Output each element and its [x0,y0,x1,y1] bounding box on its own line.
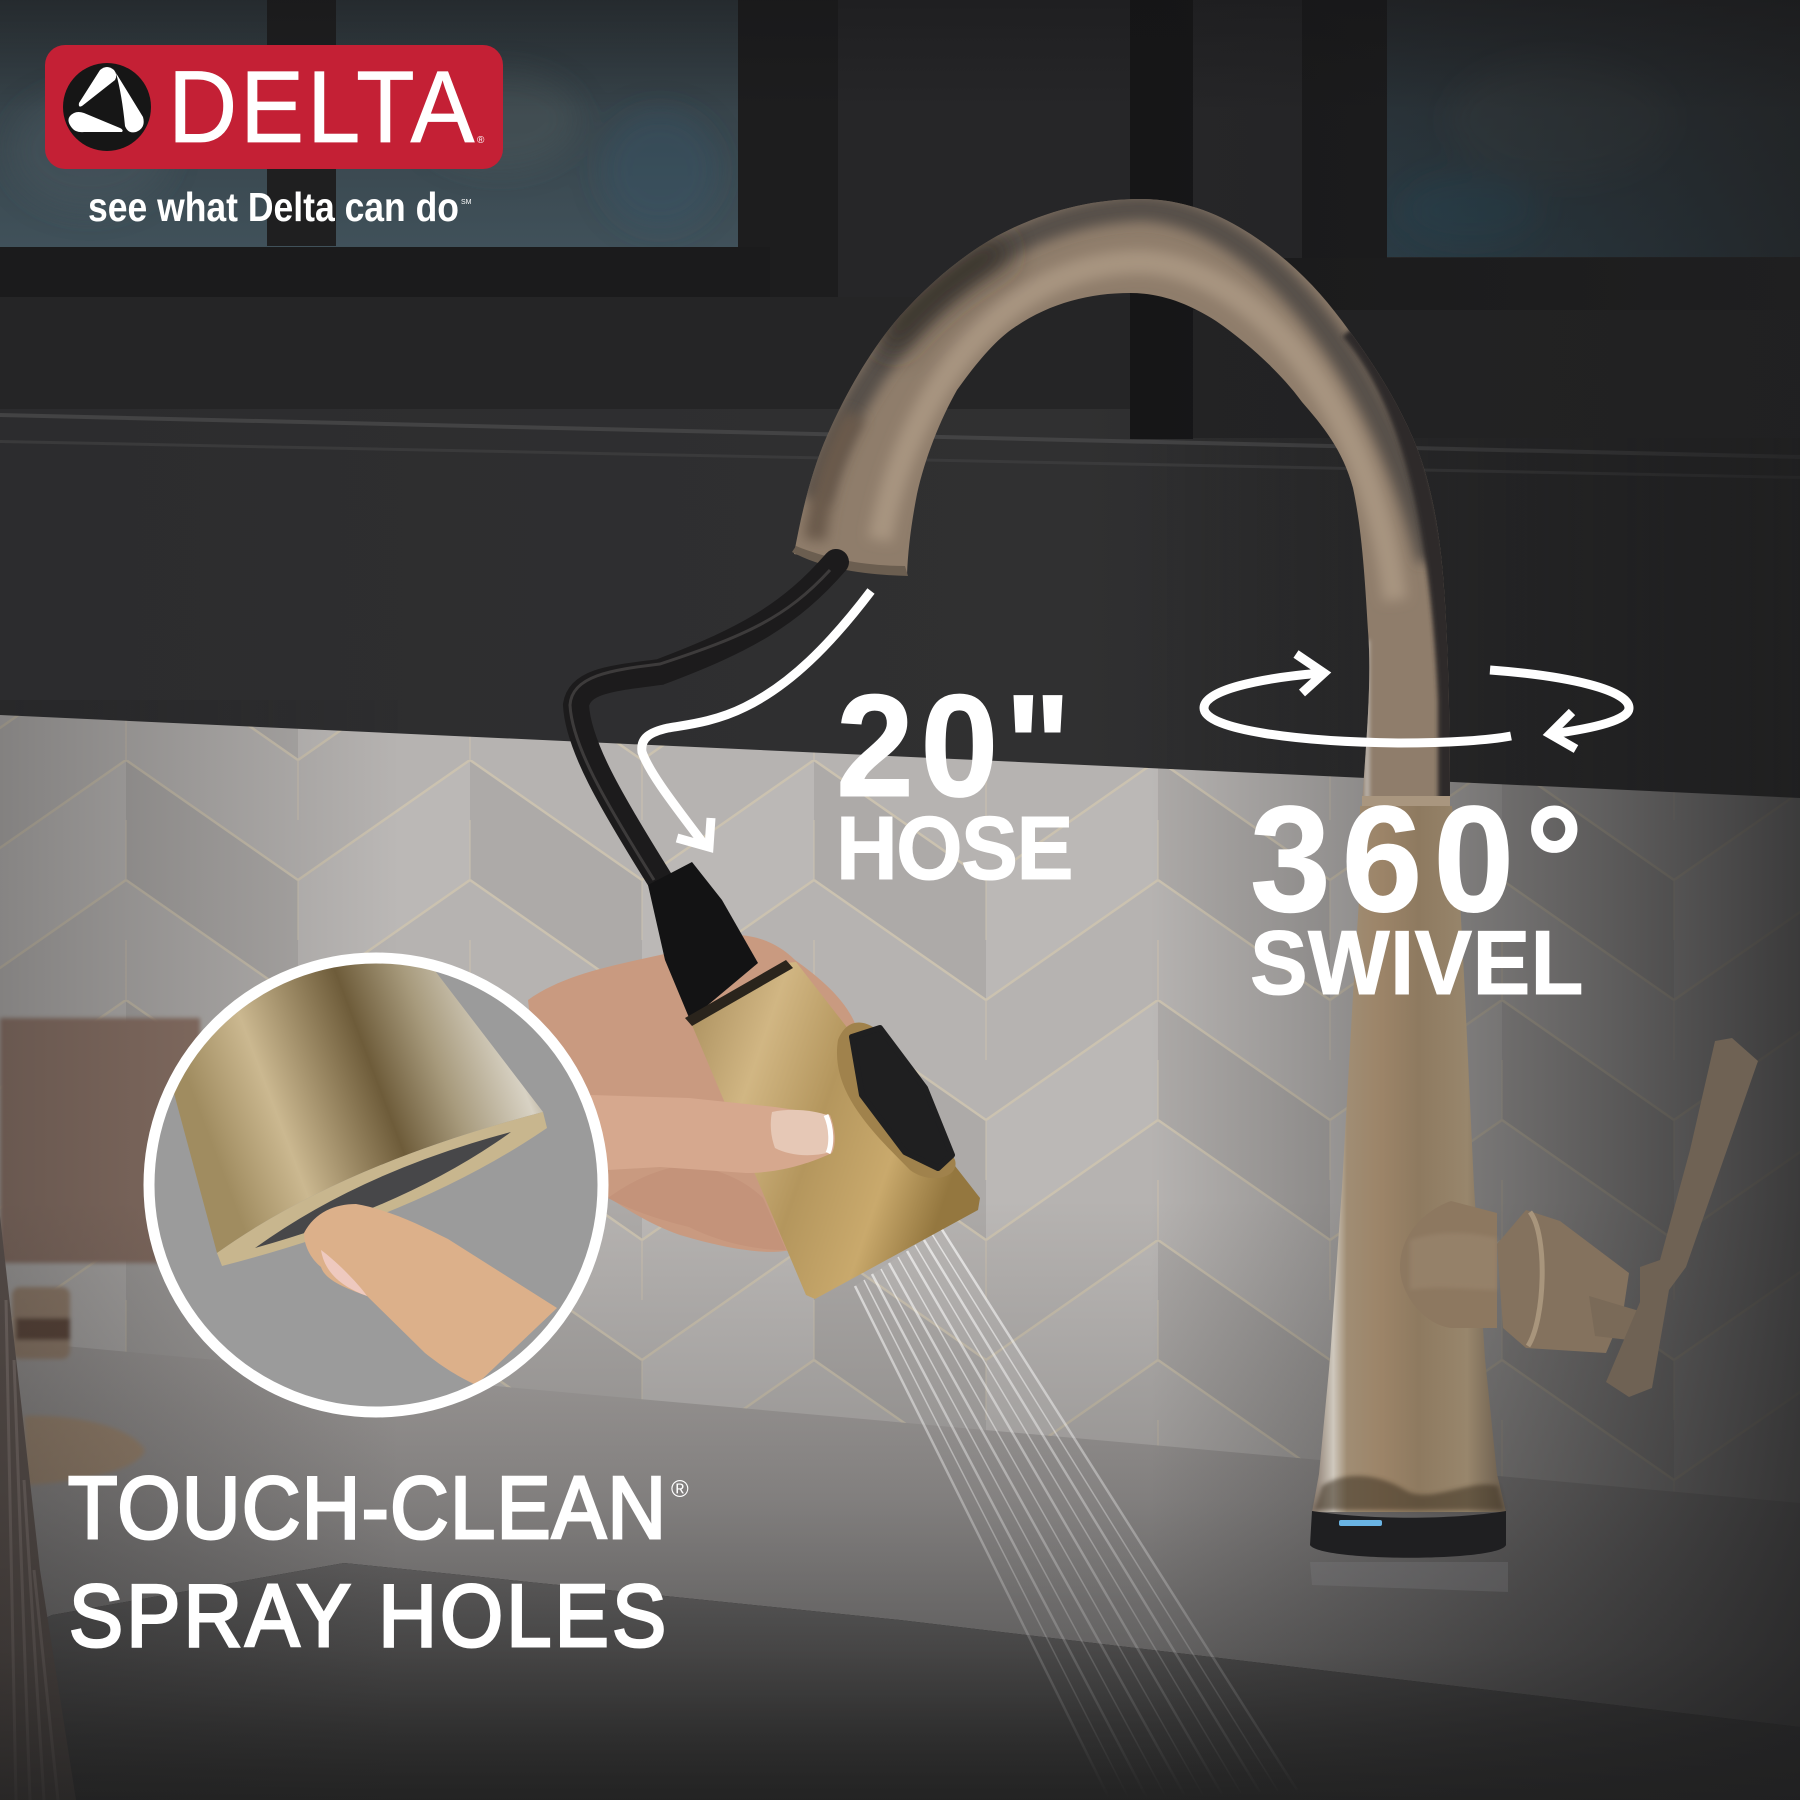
logo emblem [63,63,151,151]
background: blurred arm [0,1018,200,1263]
background: cabinet frame rails [0,0,1800,479]
logo: Delta red badge [45,45,503,169]
background: herringbone tile wall [0,715,1800,1510]
spray button [852,1028,952,1168]
hose [570,562,836,880]
main faucet [792,199,1758,1592]
background: left window pane [0,0,738,248]
swivel arrows [1204,654,1629,749]
background: countertop [0,1340,1800,1727]
LED indicator [1339,1520,1382,1526]
hose length label [836,665,1074,898]
water spray [855,1228,1297,1800]
background: wooden items [12,1287,145,1485]
background: striped cloth [0,1216,76,1800]
background: sink basin [0,1563,1800,1800]
tagline service mark: SM [461,199,472,206]
finger [304,1204,557,1385]
swivel label: 360° [1250,775,1583,944]
faucet black base [1310,1511,1506,1558]
hand: palm behind sprayer [528,935,860,1252]
handle lever [1606,1038,1758,1397]
handle hub [1400,1201,1646,1353]
hose connector [648,862,758,1020]
background: dark cabinet wall [0,0,1800,820]
nozzle rim and spray holes [217,1112,547,1266]
hand: index finger over sprayer [590,1095,835,1173]
hose length label: HOSE [836,798,1074,898]
nozzle cone [174,964,543,1253]
hose length arrow [642,591,871,847]
swivel label: SWIVEL [1250,912,1583,1013]
faucet body [1312,806,1506,1512]
hose length label: 20" [836,665,1071,828]
tagline: see what Delta can do [88,184,459,230]
touch-clean label [68,1458,689,1665]
sprayer head [685,960,980,1299]
background: right window pane [1387,0,1800,257]
faucet body reflections [1314,1476,1504,1510]
touch-clean label: SPRAY HOLES [69,1566,666,1665]
logo registered mark: ® [477,135,485,146]
base reflection [1310,1562,1508,1592]
logo wordmark: DELTA [168,49,474,164]
touch-clean label: TOUCH-CLEAN [68,1458,666,1557]
touch-clean label: ® [671,1476,689,1503]
faucet spout arc [792,199,1450,808]
callout circle: touch-clean detail [130,925,604,1413]
